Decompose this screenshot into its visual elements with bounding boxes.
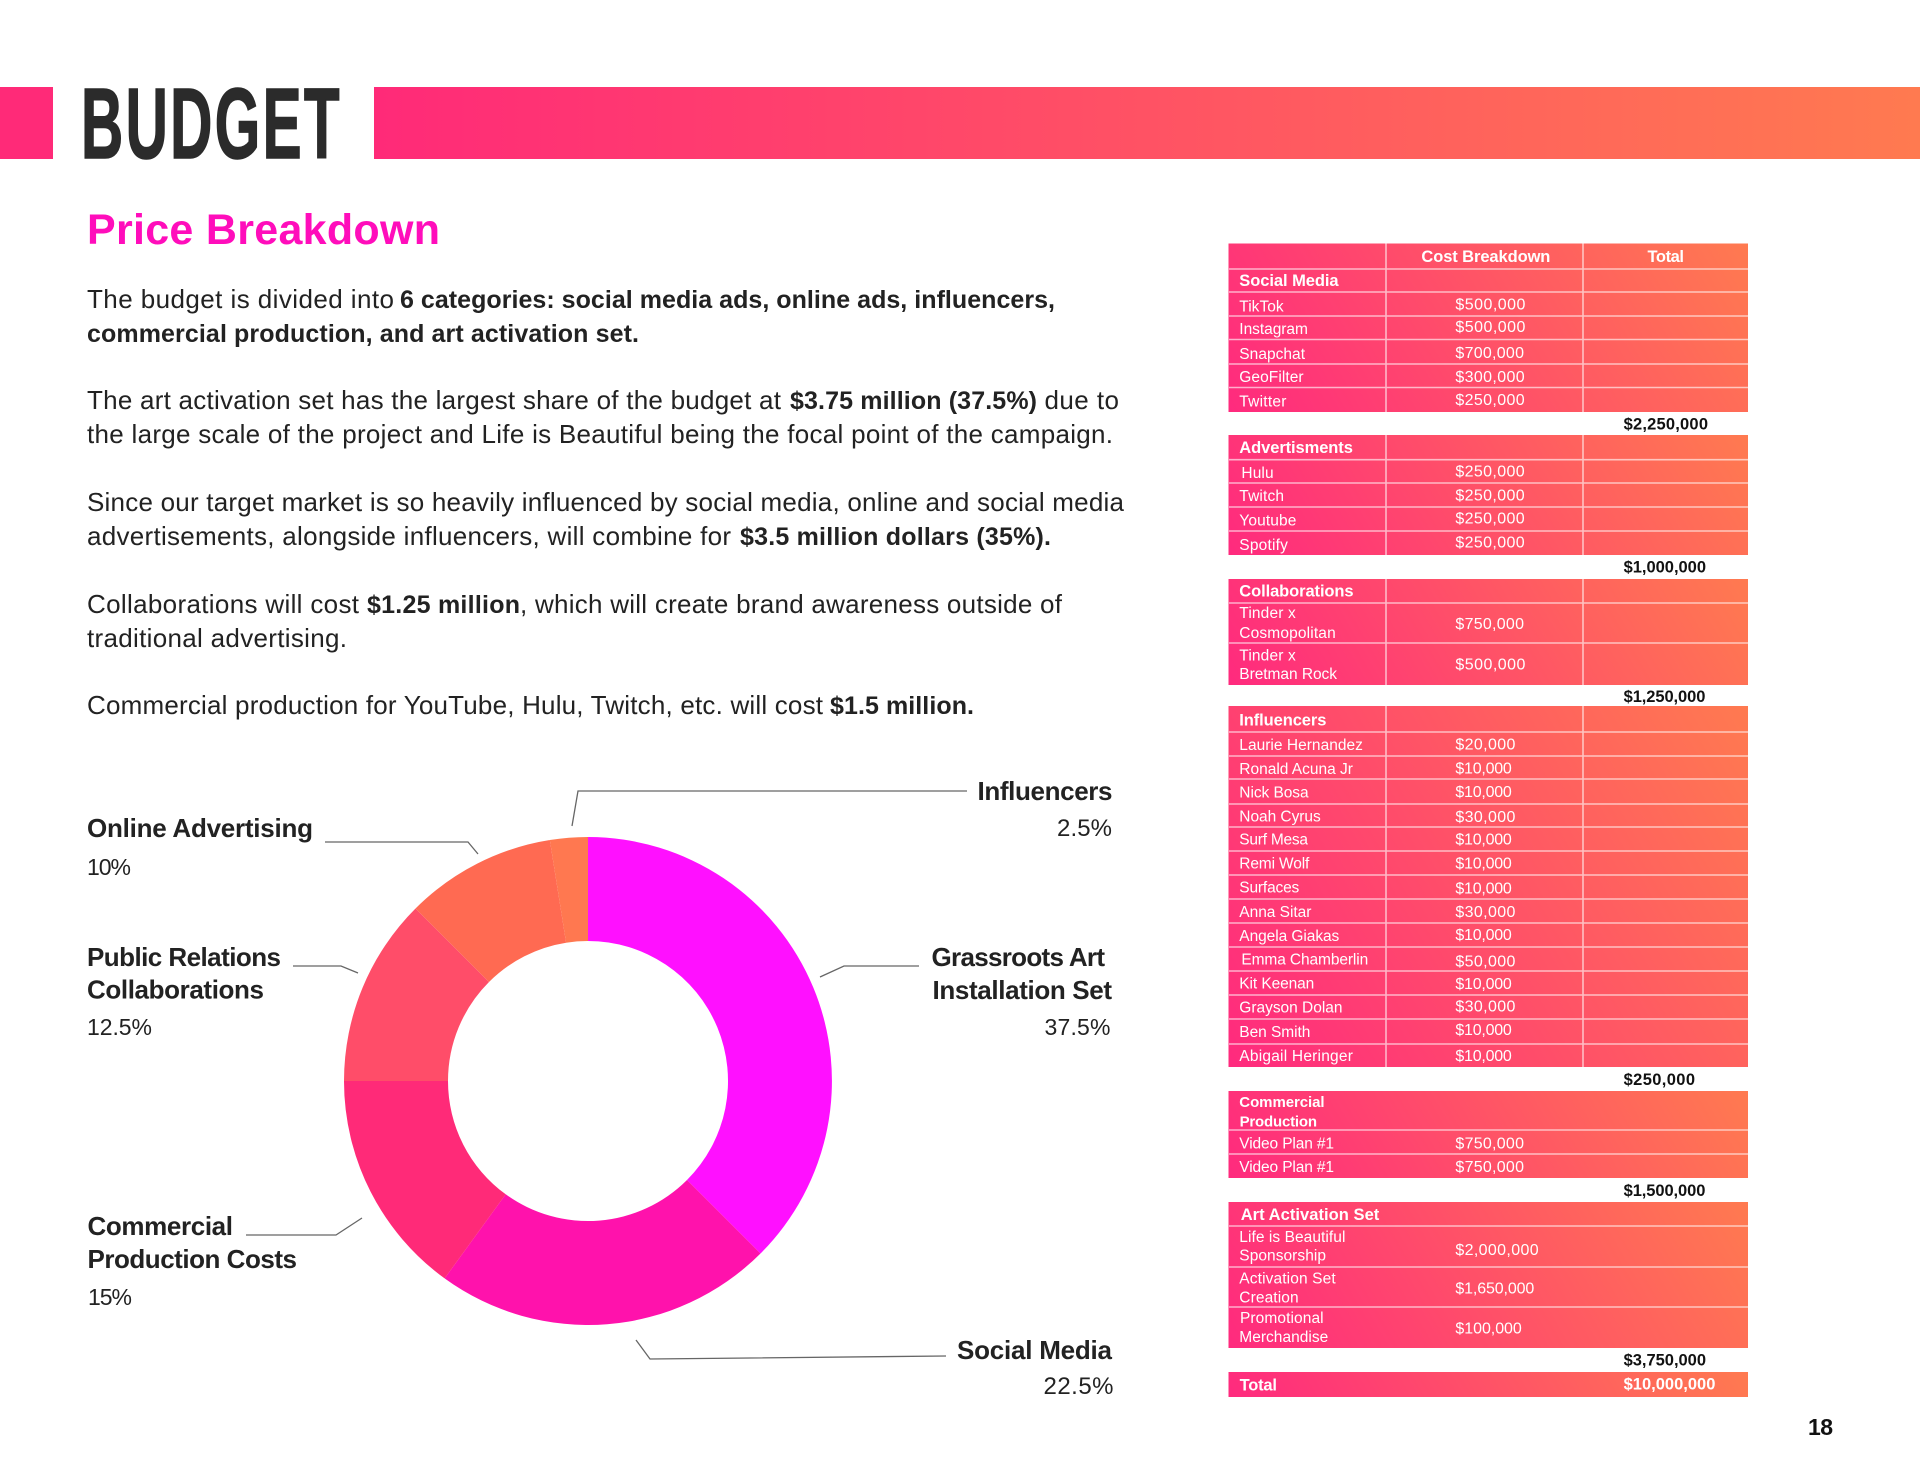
row: youtube	[1239, 510, 1525, 529]
text block: collaborations: Collaborations will cost	[87, 589, 360, 619]
title: BUDGET	[81, 69, 342, 180]
category: commercial production: Production	[1240, 1113, 1317, 1130]
row: activation set creation	[1239, 1270, 1534, 1306]
subtotal: advertisments: $1,000,000	[1624, 558, 1706, 576]
slice: influencers	[550, 837, 588, 943]
row: remi wolf	[1239, 856, 1512, 873]
row: twitter: $250,000	[1455, 392, 1525, 409]
row: ronald acuna jr	[1239, 760, 1512, 778]
header gradient bar	[374, 87, 1920, 159]
row: surfaces	[1239, 880, 1512, 897]
row: tiktok: $500,000	[1455, 296, 1525, 314]
row: grayson dolan: $30,000	[1455, 999, 1515, 1016]
row: laurie hernandez: $20,000	[1455, 736, 1515, 753]
row: tiktok: TikTok	[1239, 298, 1284, 316]
table block: art activation set	[1228, 1202, 1748, 1348]
row: activation set creation: Activation Set	[1239, 1270, 1336, 1287]
text block: art activation set: $3.75 million (37.5%)	[790, 387, 1037, 415]
total amount: $10,000,000	[1624, 1376, 1715, 1394]
page number: 18	[1808, 1414, 1833, 1440]
subtotal: art activation set: $3,750,000	[1624, 1352, 1706, 1370]
row: remi wolf: Remi Wolf	[1239, 856, 1310, 873]
row: abigail heringer	[1239, 1048, 1512, 1065]
text block: social media and influencers	[87, 487, 1125, 551]
category: advertisments: Advertisments	[1239, 439, 1353, 457]
row: tinder x cosmopolitan: $750,000	[1455, 616, 1524, 633]
slice: social media	[445, 1180, 760, 1325]
label: social media: 22.5%	[1044, 1373, 1114, 1400]
row: spotify: $250,000	[1455, 534, 1525, 551]
row: grayson dolan	[1239, 999, 1515, 1016]
row: emma chamberlin: Emma Chamberlin	[1241, 952, 1368, 969]
row: activation set creation: Creation	[1239, 1289, 1299, 1306]
row: instagram: Instagram	[1239, 321, 1308, 338]
row: spotify: Spotify	[1239, 537, 1288, 554]
label: social media	[957, 1335, 1114, 1400]
subtotal: social media: $2,250,000	[1624, 416, 1708, 434]
row: nick bosa: $10,000	[1455, 784, 1512, 801]
row: hulu: Hulu	[1241, 465, 1274, 482]
row: anna sitar: Anna Sitar	[1239, 904, 1311, 921]
row: snapchat	[1239, 345, 1524, 363]
row: video plan 1 second: $750,000	[1455, 1159, 1524, 1176]
subtotal: commercial production: $1,500,000	[1624, 1182, 1705, 1200]
text block: collaborations: $1.25 million	[367, 591, 520, 619]
text block: budget introduction: 6 categories: social media ads, online ads, influencers,	[400, 286, 1055, 314]
row: tinder x cosmopolitan	[1239, 605, 1524, 642]
leader line: influencers	[572, 791, 967, 826]
row: twitch	[1239, 488, 1525, 505]
row: snapchat: Snapchat	[1239, 346, 1306, 363]
row: surfaces: $10,000	[1455, 880, 1512, 897]
row: video plan 1 second	[1239, 1159, 1524, 1176]
row: snapchat: $700,000	[1455, 345, 1524, 362]
row: ronald acuna jr: $10,000	[1455, 760, 1512, 777]
row: life is beautiful sponsorship: $2,000,000	[1455, 1242, 1539, 1259]
text block: social media and influencers: $3.5 million dollars (35%).	[740, 523, 1051, 551]
row: surf mesa: Surf Mesa	[1239, 831, 1308, 848]
text block: social media and influencers: Since our target market is so heavily influenced by social media, online and social media	[87, 487, 1125, 517]
row: anna sitar: $30,000	[1455, 904, 1515, 921]
label: influencers	[978, 776, 1112, 842]
row: video plan 1: $750,000	[1455, 1135, 1524, 1152]
row: geofilter: $300,000	[1455, 369, 1525, 386]
text block: art activation set: The art activation set has the largest share of the budget at	[87, 385, 782, 415]
row: twitch: $250,000	[1455, 488, 1525, 505]
label: public relations collaborations: Collaborations	[87, 974, 264, 1004]
label: grassroots art installation set: Grassroots Art	[932, 942, 1105, 972]
row: life is beautiful sponsorship	[1239, 1229, 1539, 1264]
category: influencers: Influencers	[1239, 711, 1326, 729]
text block: art activation set: the large scale of the project and Life is Beautiful being the focal point of the campaign.	[87, 419, 1113, 449]
row: life is beautiful sponsorship: Life is Beautiful	[1239, 1229, 1345, 1246]
row: abigail heringer: $10,000	[1455, 1048, 1512, 1065]
text block: art activation set: due to	[1044, 385, 1119, 415]
label: grassroots art installation set	[932, 942, 1112, 1040]
row: youtube: Youtube	[1239, 512, 1296, 529]
row: tinder x bretman rock: Tinder x	[1239, 648, 1296, 664]
row: twitter	[1239, 392, 1525, 410]
category: commercial production: Commercial	[1239, 1094, 1325, 1111]
row: video plan 1: Video Plan #1	[1239, 1136, 1334, 1153]
label: online advertising: 10%	[87, 854, 131, 880]
slice: commercial production costs	[344, 1081, 506, 1278]
slice: public relations collaborations	[344, 908, 489, 1081]
label: influencers: Influencers	[978, 776, 1112, 806]
subtotal: collaborations: $1,250,000	[1624, 688, 1705, 706]
row: emma chamberlin: $50,000	[1455, 953, 1515, 970]
label: commercial production costs	[88, 1211, 297, 1310]
header accent block	[0, 87, 53, 159]
leader line: commercial production	[246, 1218, 362, 1235]
row: tinder x bretman rock: Bretman Rock	[1239, 666, 1337, 683]
heading: price breakdown: Price Breakdown	[87, 206, 440, 254]
row: promotional merchandise: Promotional	[1240, 1310, 1324, 1327]
row: tinder x bretman rock	[1239, 648, 1525, 683]
row: nick bosa	[1239, 784, 1512, 802]
row: tiktok	[1239, 296, 1525, 316]
row: twitter: Twitter	[1239, 394, 1286, 410]
column headers	[1421, 248, 1684, 266]
row: angela giakas: Angela Giakas	[1239, 928, 1340, 945]
table block: collaborations	[1228, 579, 1748, 685]
slice: online advertising	[416, 840, 566, 982]
label: commercial production costs: Commercial	[88, 1211, 233, 1241]
row: anna sitar	[1239, 904, 1515, 921]
row: hulu	[1241, 464, 1525, 482]
donut chart	[344, 837, 832, 1325]
row: tinder x cosmopolitan: Tinder x	[1239, 605, 1296, 622]
row: video plan 1	[1239, 1135, 1524, 1153]
row: surfaces: Surfaces	[1239, 880, 1300, 897]
label: commercial production costs: 15%	[88, 1284, 132, 1310]
label: public relations collaborations: 12.5%	[87, 1014, 152, 1040]
label: grassroots art installation set: 37.5%	[1044, 1014, 1110, 1040]
row: hulu: $250,000	[1455, 464, 1525, 480]
category: commercial production	[1239, 1094, 1325, 1130]
row: kit keenan: $10,000	[1455, 976, 1512, 993]
text block: collaborations: , which will create brand awareness outside of	[520, 589, 1063, 619]
table block: grand total	[1228, 1372, 1748, 1397]
table block: commercial production	[1228, 1091, 1748, 1178]
row: tinder x bretman rock: $500,000	[1455, 657, 1525, 674]
label: grassroots art installation set: Installation Set	[932, 975, 1112, 1005]
column headers: Cost Breakdown	[1421, 248, 1550, 266]
row: geofilter	[1239, 369, 1525, 386]
total label: Total	[1240, 1376, 1277, 1394]
row: angela giakas	[1239, 927, 1512, 945]
row: remi wolf: $10,000	[1455, 856, 1512, 873]
leader line: public relations	[293, 966, 358, 973]
category: social media: Social Media	[1239, 272, 1339, 290]
row: youtube: $250,000	[1455, 510, 1525, 527]
category: art activation set: Art Activation Set	[1241, 1206, 1380, 1224]
text block: budget introduction: The budget is divided into	[87, 284, 394, 314]
row: activation set creation: $1,650,000	[1455, 1280, 1534, 1297]
text block: collaborations	[87, 589, 1063, 653]
row: tinder x cosmopolitan: Cosmopolitan	[1239, 625, 1336, 642]
row: laurie hernandez	[1239, 736, 1515, 754]
row: life is beautiful sponsorship: Sponsorship	[1239, 1247, 1326, 1264]
row: noah cyrus: Noah Cyrus	[1239, 808, 1321, 825]
row: laurie hernandez: Laurie Hernandez	[1239, 737, 1363, 754]
leader line: grassroots art	[820, 966, 919, 977]
text block: commercial production: $1.5 million.	[830, 692, 974, 720]
text block: collaborations: traditional advertising.	[87, 623, 347, 653]
label: online advertising: Online Advertising	[87, 813, 313, 843]
subtotal: influencers: $250,000	[1624, 1071, 1695, 1089]
leader line: social media	[636, 1340, 946, 1359]
label: commercial production costs: Production Costs	[88, 1244, 297, 1274]
row: noah cyrus: $30,000	[1455, 809, 1515, 826]
slice: grassroots art installation set	[588, 837, 832, 1254]
row: ben smith	[1239, 1022, 1512, 1041]
row: instagram	[1239, 319, 1525, 338]
row: promotional merchandise: Merchandise	[1239, 1329, 1328, 1346]
row: spotify	[1239, 534, 1525, 554]
row: grayson dolan: Grayson Dolan	[1239, 999, 1342, 1016]
table block: social media	[1228, 243, 1748, 412]
label: online advertising	[87, 813, 313, 880]
table block: influencers	[1228, 706, 1748, 1067]
row: instagram: $500,000	[1455, 319, 1525, 336]
row: ronald acuna jr: Ronald Acuna Jr	[1239, 761, 1353, 778]
column headers: Total	[1648, 248, 1684, 266]
label: public relations collaborations: Public Relations	[87, 942, 281, 972]
label: influencers: 2.5%	[1057, 815, 1112, 842]
row: angela giakas: $10,000	[1455, 927, 1512, 944]
category: collaborations: Collaborations	[1239, 583, 1354, 601]
row: abigail heringer: Abigail Heringer	[1239, 1048, 1353, 1065]
label: social media: Social Media	[957, 1335, 1113, 1365]
text block: budget introduction	[87, 284, 1055, 348]
row: geofilter: GeoFilter	[1239, 369, 1304, 386]
row: ben smith: Ben Smith	[1239, 1024, 1310, 1041]
row: surf mesa: $10,000	[1455, 832, 1512, 849]
row: video plan 1 second: Video Plan #1	[1239, 1159, 1334, 1176]
row: kit keenan	[1239, 976, 1512, 993]
row: emma chamberlin	[1241, 952, 1515, 970]
row: kit keenan: Kit Keenan	[1239, 976, 1314, 993]
row: promotional merchandise	[1239, 1310, 1522, 1346]
text block: art activation set	[87, 385, 1119, 449]
row: promotional merchandise: $100,000	[1455, 1320, 1522, 1337]
row: ben smith: $10,000	[1455, 1022, 1512, 1039]
table block: advertisments	[1228, 435, 1748, 555]
text block: budget introduction: commercial production, and art activation set.	[87, 320, 639, 348]
row: surf mesa	[1239, 831, 1512, 849]
text block: commercial production: Commercial production for YouTube, Hulu, Twitch, etc. will cost	[87, 690, 824, 720]
text block: social media and influencers: advertisements, alongside influencers, will combine for	[87, 521, 731, 551]
leader line: online advertising	[325, 842, 478, 854]
row: noah cyrus	[1239, 808, 1515, 826]
row: twitch: Twitch	[1239, 488, 1284, 505]
row: nick bosa: Nick Bosa	[1239, 784, 1309, 802]
label: public relations collaborations	[87, 942, 281, 1040]
